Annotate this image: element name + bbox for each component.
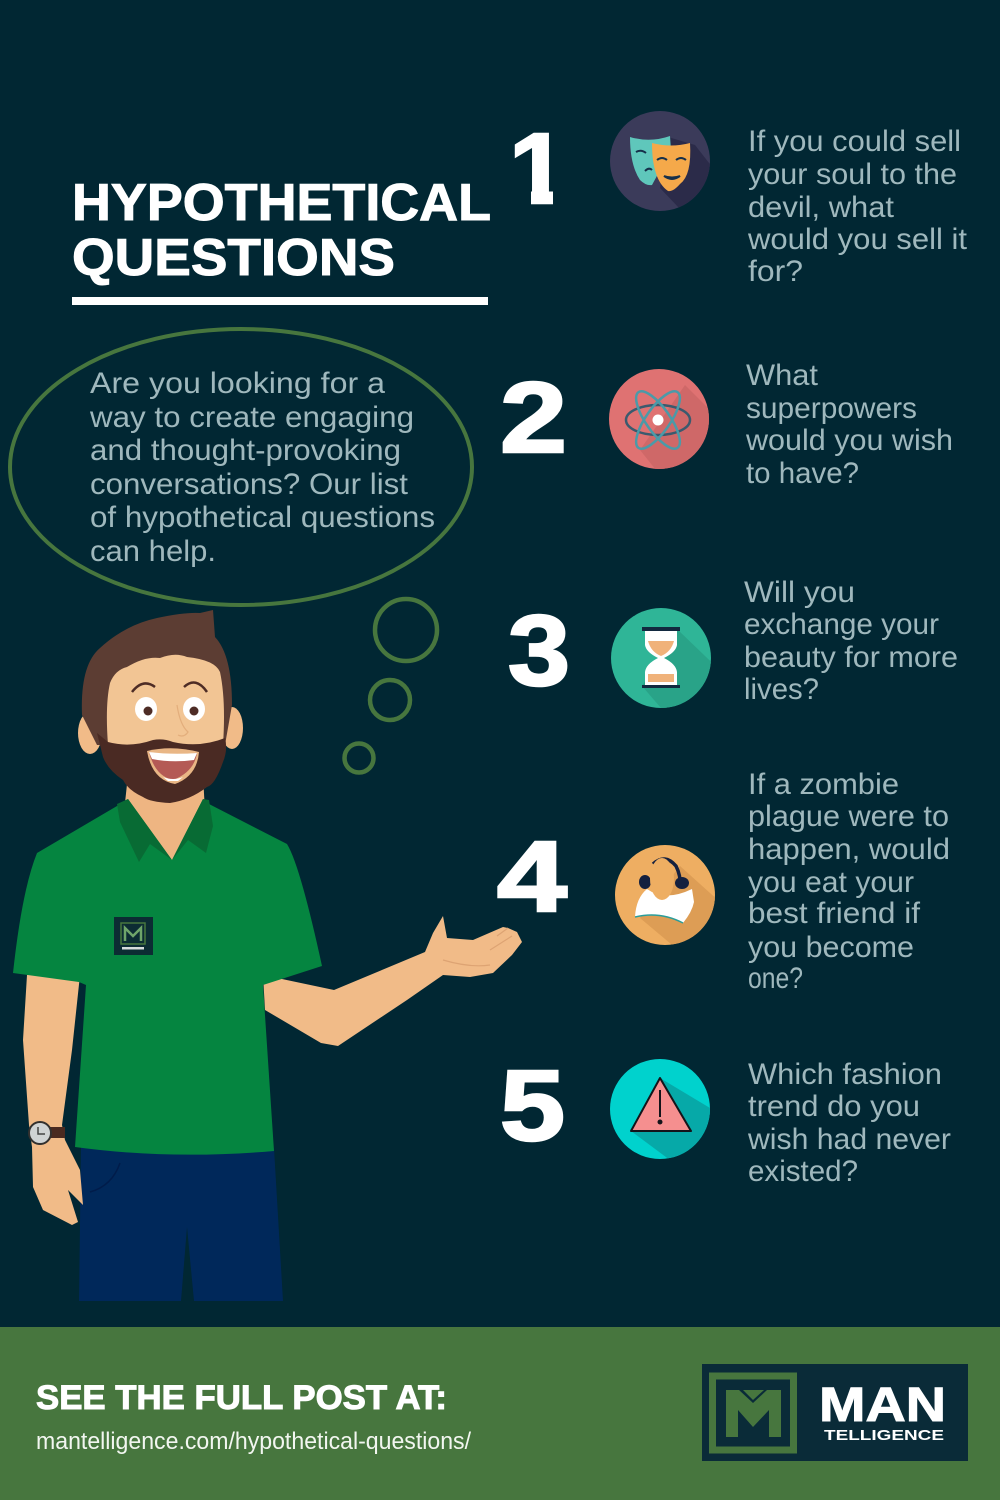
question text	[748, 768, 950, 995]
question text: best friend if	[748, 897, 921, 930]
thought bubble with intro text: of hypothetical questions	[90, 501, 435, 534]
title: QUESTIONS	[72, 229, 395, 287]
question text: Will you	[744, 576, 855, 609]
question text: your soul to the	[748, 158, 957, 191]
beard	[97, 733, 226, 803]
icon: warning triangle	[610, 1059, 710, 1159]
thought bubble with intro text: and thought-provoking	[90, 434, 401, 467]
neck	[124, 775, 205, 862]
hair	[82, 610, 232, 745]
icon: person with headphones	[615, 845, 715, 945]
thought bubble with intro text: can help.	[90, 535, 216, 568]
question text: exchange your	[744, 608, 939, 641]
question text: trend do you	[748, 1090, 920, 1123]
thought bubble with intro text: Are you looking for a	[90, 367, 385, 400]
shirt	[13, 799, 322, 1155]
question text: If you could sell	[748, 125, 961, 158]
question text: would you sell it	[747, 223, 968, 256]
question text: What	[746, 359, 819, 392]
question 4: 4	[497, 821, 567, 933]
left arm and hand	[23, 975, 83, 1225]
icon: theatre masks	[610, 111, 710, 211]
question text: beauty for more	[744, 641, 958, 674]
question 1	[509, 111, 968, 288]
question text	[745, 359, 953, 490]
question text: to have?	[746, 457, 859, 490]
title: HYPOTHETICAL	[72, 174, 491, 232]
question 3	[509, 580, 957, 708]
thought bubble with intro text: conversations? Our list	[90, 468, 409, 501]
question text	[744, 576, 958, 706]
question 3: 3	[508, 595, 570, 707]
logo: MAN	[819, 1379, 946, 1432]
question text: you eat your	[748, 866, 914, 899]
icon: atom	[609, 369, 709, 469]
face	[107, 655, 224, 745]
shirt badge	[114, 917, 153, 955]
icon: hourglass	[611, 608, 711, 708]
wristwatch	[29, 1122, 65, 1144]
question 1: 1	[509, 113, 567, 225]
logo: TELLIGENCE	[824, 1427, 944, 1444]
right arm and hand	[263, 916, 522, 1046]
footer url: mantelligence.com/hypothetical-questions/	[36, 1428, 471, 1455]
question text: superpowers	[746, 392, 917, 425]
trousers	[79, 1146, 283, 1301]
ears	[78, 712, 102, 754]
thought bubble with intro text: way to create engaging	[89, 401, 414, 434]
eyes	[132, 683, 207, 736]
logo	[702, 1364, 968, 1461]
question 5: 5	[500, 1050, 565, 1162]
question 4	[497, 768, 950, 995]
question text: would you wish	[745, 424, 953, 457]
question text: If a zombie	[748, 768, 899, 801]
question text: existed?	[748, 1155, 858, 1188]
thought bubble with intro text	[10, 329, 472, 772]
question text: for?	[748, 255, 803, 288]
question text: plague were to	[748, 800, 949, 833]
question text: Which fashion	[748, 1058, 942, 1091]
question text: lives?	[744, 673, 819, 706]
question 2	[502, 364, 951, 484]
title	[72, 174, 491, 305]
footer band	[0, 1327, 1000, 1500]
question text: happen, would	[748, 833, 950, 866]
question 5	[502, 1059, 950, 1182]
footer call to action: SEE THE FULL POST AT:	[36, 1379, 447, 1417]
mouth	[147, 748, 199, 784]
question text	[747, 1058, 951, 1188]
illustration: presenter man	[13, 610, 522, 1301]
question text: one?	[748, 962, 803, 995]
question text: you become	[748, 931, 914, 964]
question text	[747, 125, 968, 288]
question text: devil, what	[748, 191, 895, 224]
question 2: 2	[500, 362, 567, 474]
question text: wish had never	[747, 1123, 951, 1156]
